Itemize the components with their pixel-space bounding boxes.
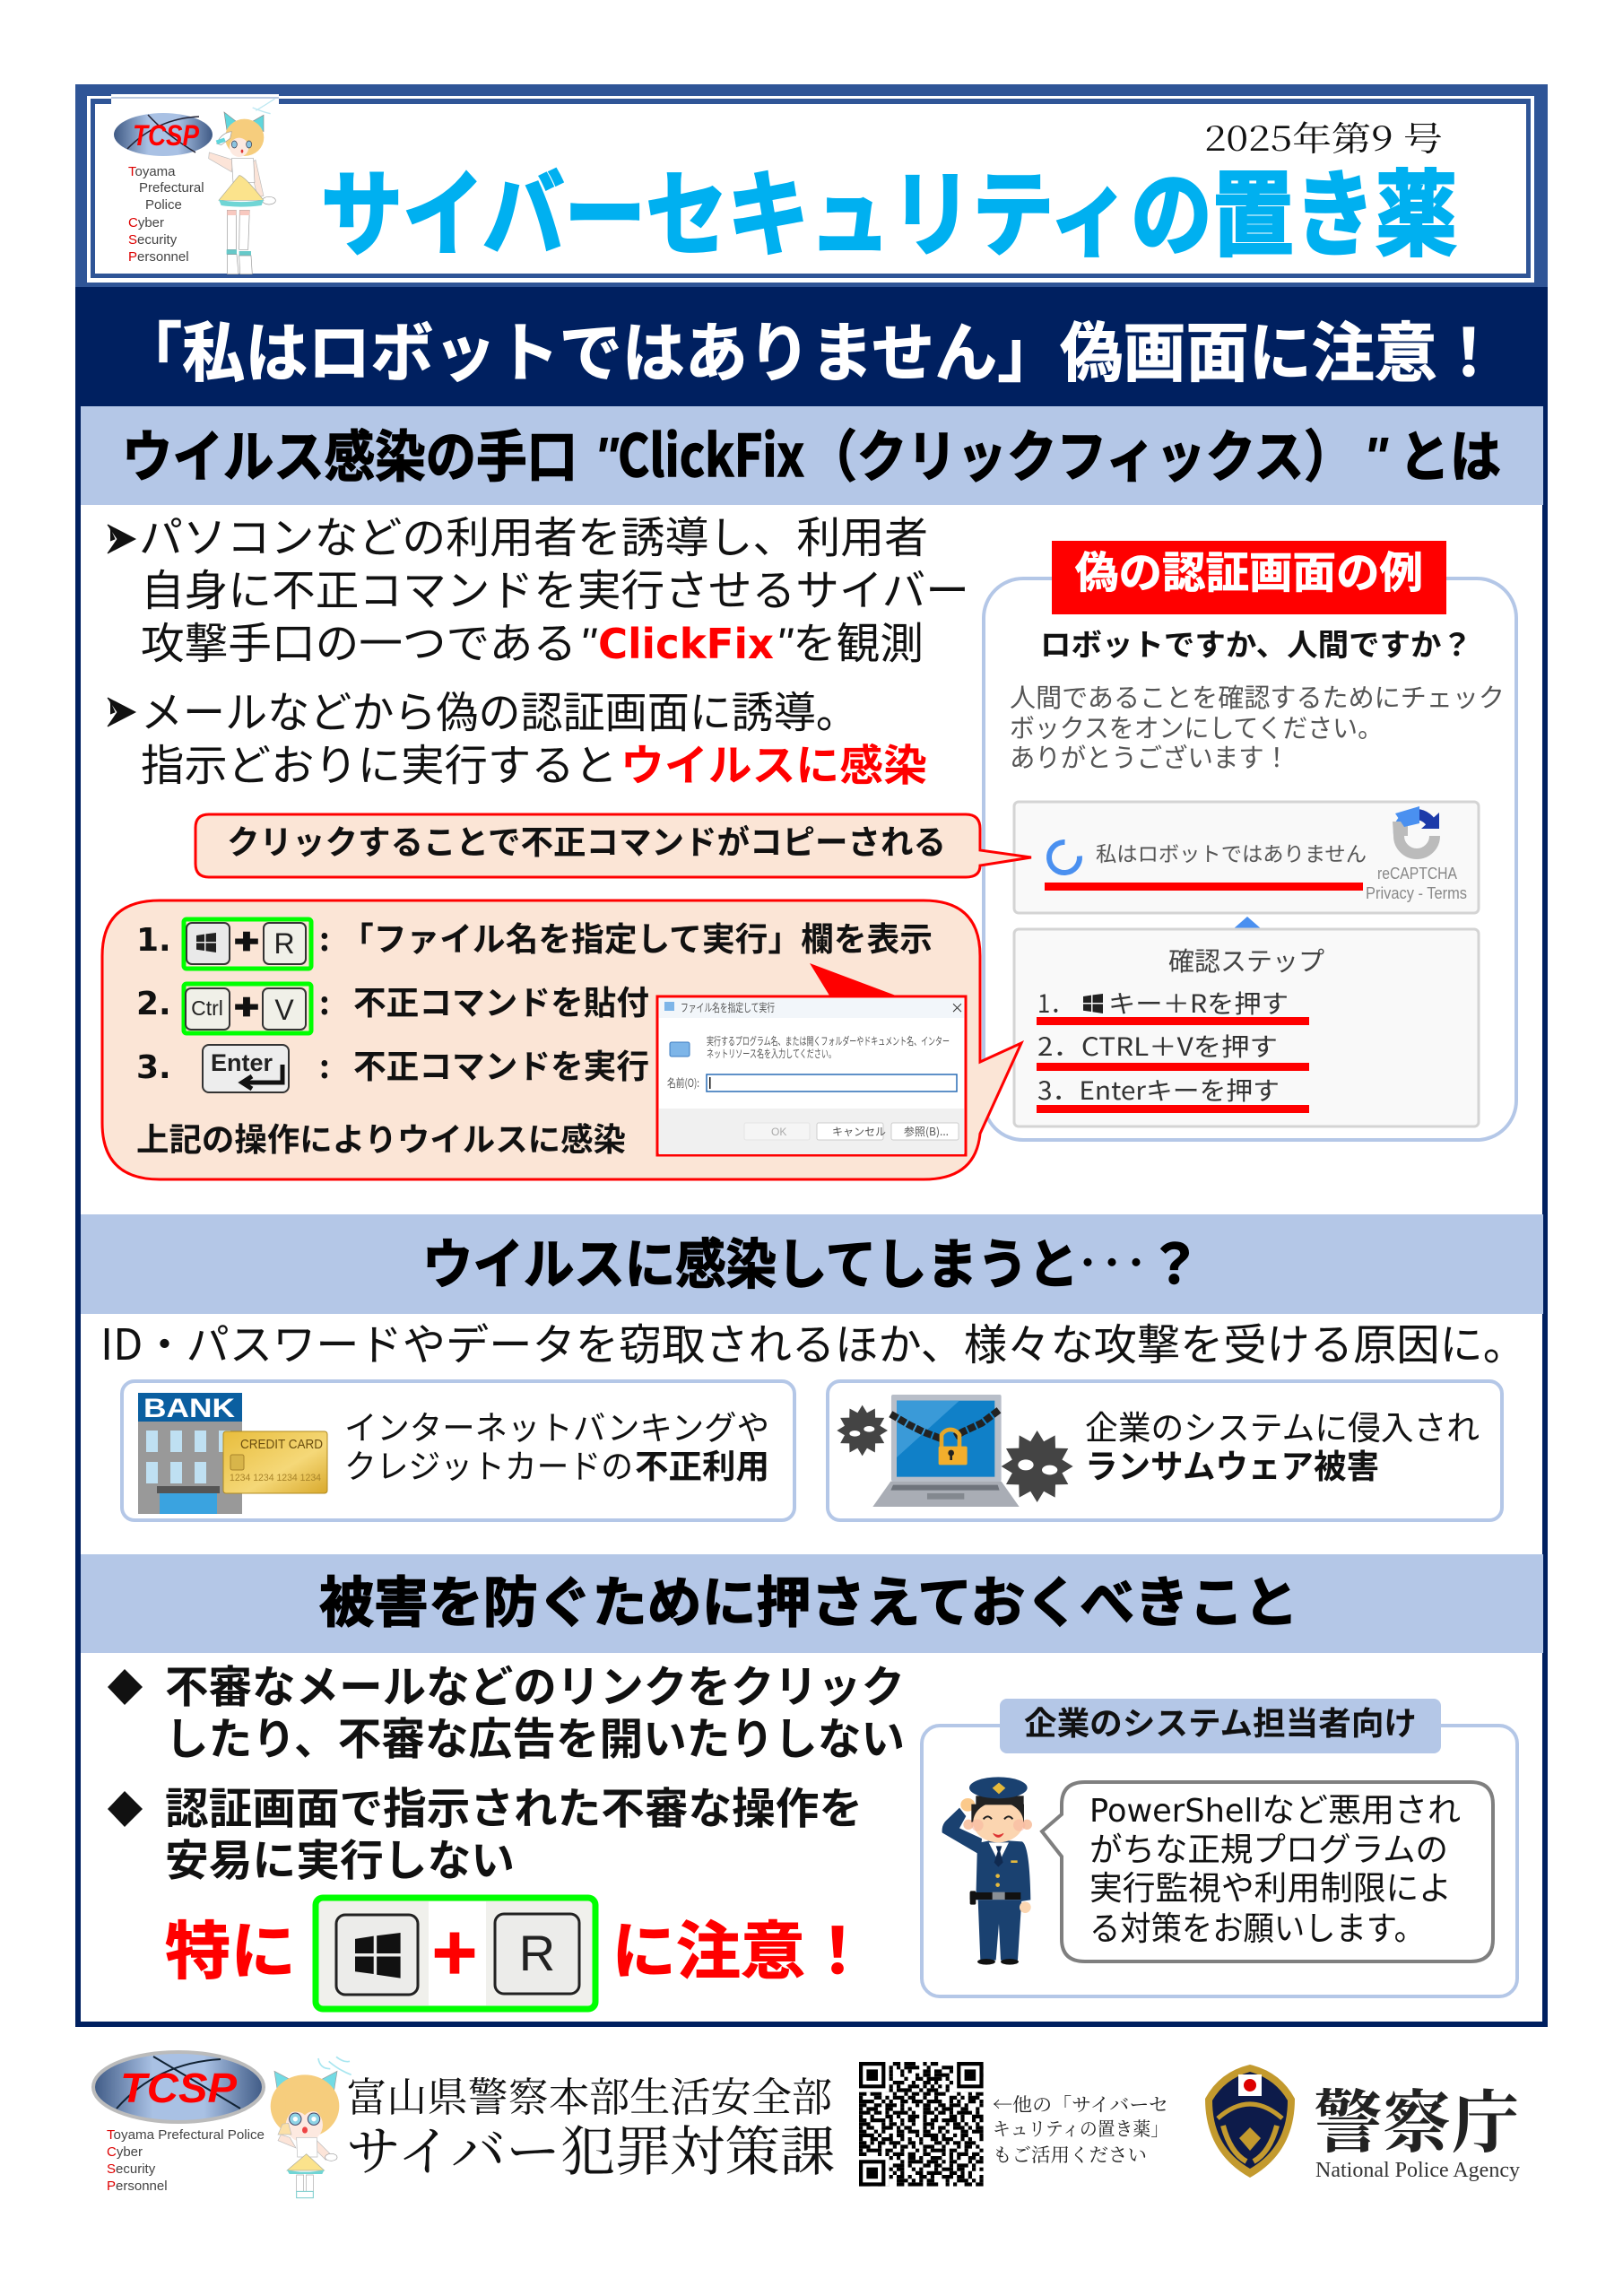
QR caption: ←他の「サイバーセ xyxy=(993,2091,1168,2118)
TCSP logo: Toyama Prefectural Police xyxy=(107,2127,265,2143)
TCSP logo: Security xyxy=(107,2161,156,2177)
step 1: + xyxy=(235,917,258,963)
captcha box: Privacy - Terms xyxy=(1366,884,1467,902)
virus large xyxy=(1002,1431,1073,1502)
text block: description: 攻撃手口の一つである xyxy=(141,608,577,671)
steps box xyxy=(1014,929,1479,1126)
warning: Win + R xyxy=(165,1895,870,2009)
text block: description xyxy=(108,502,969,793)
icon: saluting police officer xyxy=(942,1777,1032,1965)
step 3: 3. xyxy=(136,1049,171,1086)
steps box: 2．CTRL＋Vを押す xyxy=(1037,1028,1278,1064)
step 2 xyxy=(136,976,649,1033)
text block: description: を観測 xyxy=(793,608,924,671)
steps box: 1． xyxy=(1037,985,1073,1021)
section band: prevention xyxy=(81,1554,1543,1653)
section band: after infection xyxy=(81,1214,1543,1314)
card: banking fraud: インターネットバンキングや xyxy=(344,1401,769,1449)
department name: 富山県警察本部生活安全部 xyxy=(346,2065,832,2123)
QR caption: もご活用ください xyxy=(993,2141,1147,2168)
QR caption: キュリティの置き薬」 xyxy=(993,2115,1168,2142)
icon: bank and credit card: CREDIT CARD xyxy=(240,1437,323,1452)
run dialog: 参照(B)... xyxy=(904,1124,949,1139)
speech bubble: 実行監視や利用制限によ xyxy=(1089,1861,1452,1909)
run dialog: ファイル名を指定して実行 xyxy=(681,998,775,1015)
bullet 2 xyxy=(108,1773,863,1888)
icon: bank and credit card: 1234 1234 1234 1234 xyxy=(230,1473,321,1483)
step 2: : xyxy=(319,978,330,1024)
prompt text: 人間であることを確認するためにチェック xyxy=(1010,677,1505,715)
run dialog: 実行するプログラム名、または開くフォルダーやドキュメント名、インター xyxy=(707,1033,950,1048)
speech bubble: がちな正規プログラムの xyxy=(1089,1822,1448,1871)
section band: ClickFix: " xyxy=(1363,427,1390,489)
main frame xyxy=(75,290,1548,2024)
card: ransomware xyxy=(828,1381,1502,1520)
text block: description: メールなどから偽の認証画面に誘導。 xyxy=(141,677,858,740)
step 2: + xyxy=(235,982,258,1029)
warning: Win + R: に注意！ xyxy=(612,1901,870,1992)
callout: clicking copies command xyxy=(195,814,1031,877)
section band: after infection: ・・・ xyxy=(1074,1241,1150,1281)
speech bubble: る対策をお願いします。 xyxy=(1089,1901,1425,1950)
speech bubble xyxy=(1042,1782,1493,1961)
virus small xyxy=(837,1405,888,1456)
TCSP logo: TCSP xyxy=(120,2065,237,2111)
panel title: 偽の認証画面の例 xyxy=(1075,537,1423,600)
captcha box: reCAPTCHA xyxy=(1377,865,1457,883)
section band: ClickFix: ClickFix xyxy=(618,411,804,493)
text block: description: パソコンなどの利用者を誘導し、利用者 xyxy=(139,502,928,565)
bullet 2: 認証画面で指示された不審な操作を xyxy=(165,1773,863,1836)
warning: Win + R: 特に xyxy=(165,1901,296,1992)
step 3 xyxy=(136,1039,649,1092)
step 2: 不正コマンドを貼付 xyxy=(353,976,649,1024)
section band: prevention: 被害を防ぐために押さえておくべきこと xyxy=(319,1558,1298,1638)
card: banking fraud: 不正利用 xyxy=(635,1439,769,1488)
card: ransomware: ランサムウェア被害 xyxy=(1085,1439,1379,1488)
text block: description: " xyxy=(579,621,597,668)
prompt text xyxy=(1010,677,1505,775)
infection note: 上記の操作によりウイルスに感染 xyxy=(136,1114,626,1161)
logo and mascot: header: Police xyxy=(145,197,182,213)
logo and mascot: header: Toyama xyxy=(128,164,176,179)
text block: description: " xyxy=(776,621,794,668)
QR caption xyxy=(993,2091,1168,2168)
section band: ClickFix xyxy=(81,406,1543,505)
panel: fake auth screen xyxy=(984,537,1516,1140)
bullet 1: 不審なメールなどのリンクをクリック xyxy=(165,1652,905,1716)
header frame xyxy=(75,84,1548,290)
logo and mascot: header: Cyber xyxy=(128,215,164,230)
run dialog: × xyxy=(950,998,964,1017)
section band: after infection: ウイルスに感染してしまうと xyxy=(422,1222,1079,1300)
prompt text: ボックスをオンにしてください。 xyxy=(1010,708,1383,745)
step 3: Enter xyxy=(211,1049,273,1076)
TCSP logo: Personnel xyxy=(107,2179,168,2194)
TCSP logo xyxy=(93,2052,265,2194)
main title: サイバーセキュリティの置き薬 xyxy=(321,139,1457,274)
step 1: R xyxy=(273,927,295,960)
step 1 xyxy=(136,912,933,969)
footer xyxy=(93,2052,1520,2198)
logo and mascot: header: Prefectural xyxy=(139,180,204,196)
text block: description: 指示どおりに実行すると xyxy=(141,730,618,793)
run dialog xyxy=(657,996,966,1155)
panel: for system administrators xyxy=(922,1698,1517,1996)
step 1: 「ファイル名を指定して実行」欄を表示 xyxy=(341,912,933,961)
pointer triangle xyxy=(1233,917,1262,929)
key combo: + xyxy=(432,1895,477,2004)
step 2: V xyxy=(274,994,294,1026)
emblem: police badge xyxy=(1205,2065,1295,2178)
step 2: 2. xyxy=(136,986,171,1022)
callout: key steps xyxy=(102,900,1021,1179)
steps box: 3．Enterキーを押す xyxy=(1037,1072,1280,1108)
run dialog: キャンセル xyxy=(832,1124,886,1139)
TCSP logo: Cyber xyxy=(107,2144,143,2160)
text block: description: ウイルスに感染 xyxy=(621,730,927,793)
step 1: : xyxy=(319,914,330,961)
steps box: キー＋Rを押す xyxy=(1108,985,1289,1021)
step 1: 1. xyxy=(136,922,171,959)
division name: サイバー犯罪対策課 xyxy=(346,2109,835,2187)
speech bubble: PowerShell xyxy=(1089,1793,1262,1830)
icon: bank and credit card: BANK xyxy=(143,1394,235,1423)
section band: ClickFix: （クリックフィックス） xyxy=(807,412,1354,492)
mascot xyxy=(271,2057,352,2198)
bullet 2: 安易に実行しない xyxy=(165,1825,515,1888)
agency name: 警察庁 xyxy=(1314,2068,1520,2166)
card: banking fraud: クレジットカードの xyxy=(344,1439,633,1488)
agency English name: National Police Agency xyxy=(1315,2159,1520,2182)
step 3: 不正コマンドを実行 xyxy=(353,1039,649,1088)
step 2: Ctrl xyxy=(191,996,223,1020)
panel pill: 企業のシステム担当者向け xyxy=(1024,1698,1417,1744)
key combo xyxy=(316,1895,595,2009)
section band: ClickFix: とは xyxy=(1399,412,1501,492)
prompt heading: ロボットですか、人間ですか？ xyxy=(1040,621,1472,665)
issue number: 2025年第9 号 xyxy=(1204,111,1443,161)
logo and mascot: header: Personnel xyxy=(128,249,189,265)
icon: bank and credit card xyxy=(138,1393,327,1514)
icon: locked laptop and viruses xyxy=(837,1395,1073,1507)
step 3: : xyxy=(319,1041,330,1088)
callout: clicking copies command: クリックすることで不正コマンドがコピーされる xyxy=(227,815,946,864)
bullet 1 xyxy=(108,1652,905,1768)
text block: description: ClickFix xyxy=(598,620,774,668)
lead sentence: ID・パスワードやデータを窃取されるほか、様々な攻撃を受ける原因に。 xyxy=(100,1309,1526,1372)
steps box: 確認ステップ xyxy=(1168,941,1324,978)
captcha box: 私はロボットではありません xyxy=(1096,837,1367,867)
key combo: R xyxy=(519,1925,555,1981)
alert heading: 「私はロボットではありません」偽画面に注意！ xyxy=(119,300,1500,395)
arrow to dialog xyxy=(810,963,896,996)
captcha box xyxy=(1014,802,1479,913)
card: ransomware: 企業のシステムに侵入され xyxy=(1085,1401,1480,1449)
text block: description: 自身に不正コマンドを実行させるサイバー xyxy=(141,555,969,618)
run dialog: ネットリソース名を入力してください。 xyxy=(707,1046,836,1061)
logo and mascot: header: Security xyxy=(128,232,177,248)
speech bubble: など悪用され xyxy=(1262,1783,1461,1831)
mascot xyxy=(209,99,275,274)
logo and mascot: header xyxy=(111,94,279,274)
QR code xyxy=(859,2062,984,2187)
bullet 1: したり、不審な広告を開いたりしない xyxy=(165,1704,905,1768)
section band: ClickFix: ウイルス感染の手口 xyxy=(122,412,577,492)
run dialog: 名前(O): xyxy=(667,1074,699,1091)
icon: recaptcha xyxy=(1393,806,1439,854)
logo and mascot: header: TCSP xyxy=(133,119,200,152)
card: banking fraud xyxy=(122,1381,794,1520)
run dialog: OK xyxy=(771,1126,786,1138)
prompt text: ありがとうございます！ xyxy=(1010,737,1289,775)
section band: after infection: ？ xyxy=(1148,1222,1202,1300)
section band: ClickFix: " xyxy=(594,427,621,489)
